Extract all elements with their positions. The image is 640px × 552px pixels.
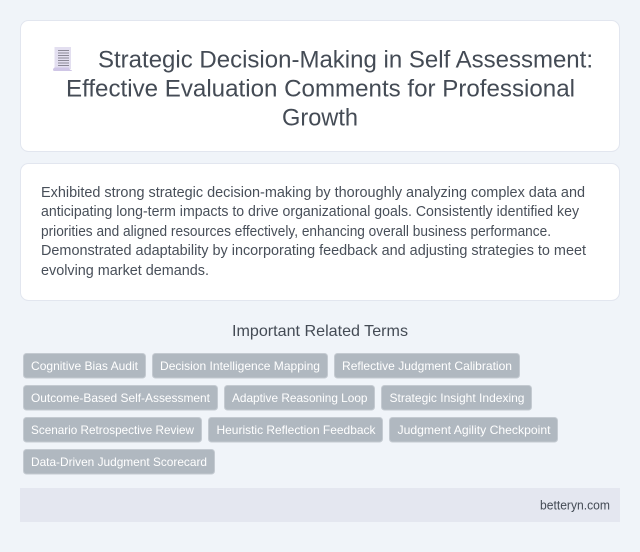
tag: Cognitive Bias Audit <box>31 359 139 373</box>
tag: Data-Driven Judgment Scorecard <box>31 455 207 469</box>
tag: Outcome-Based Self-Assessment <box>31 391 211 405</box>
text block: evaluation comment: Exhibited strong strategic decision-making by thoroughly analyzing complex data and <box>41 185 585 201</box>
tag <box>382 386 532 410</box>
text block: evaluation comment: Demonstrated adaptability by incorporating feedback and adjusting strategies to meet <box>41 243 586 259</box>
tag: Judgment Agility Checkpoint <box>398 423 551 437</box>
heading: related terms: Important Related Terms <box>232 323 408 340</box>
tag: Strategic Insight Indexing <box>390 391 524 405</box>
text block: evaluation comment: evolving market demands. <box>41 263 209 279</box>
tag <box>24 450 214 474</box>
title: Growth <box>282 104 358 132</box>
tag <box>24 386 218 410</box>
icon: document scroll <box>53 47 72 71</box>
tag <box>224 386 374 410</box>
tag: Scenario Retrospective Review <box>31 423 194 437</box>
panel: evaluation comment <box>20 164 620 300</box>
tag <box>152 354 328 378</box>
footer: betteryn.com <box>540 498 610 512</box>
tag: Reflective Judgment Calibration <box>342 359 512 373</box>
title: Strategic Decision-Making in Self Assessment: <box>98 46 593 74</box>
text block: evaluation comment: priorities and aligned resources effectively, enhancing overall business performance. <box>41 224 551 240</box>
tag list <box>24 354 558 474</box>
tag <box>208 418 382 442</box>
tag <box>24 418 202 442</box>
title <box>66 46 593 132</box>
tag <box>334 354 520 378</box>
panel: title card <box>20 20 620 152</box>
tag <box>24 354 146 378</box>
text block: evaluation comment: anticipating long-term impacts to drive organizational goals. Consistently identified key <box>41 204 580 220</box>
tag: Adaptive Reasoning Loop <box>232 391 368 405</box>
title: Effective Evaluation Comments for Professional <box>66 76 575 102</box>
footer <box>20 488 620 522</box>
tag <box>390 418 558 442</box>
tag: Decision Intelligence Mapping <box>160 359 320 373</box>
tag: Heuristic Reflection Feedback <box>216 423 376 437</box>
text block: evaluation comment <box>41 185 586 279</box>
